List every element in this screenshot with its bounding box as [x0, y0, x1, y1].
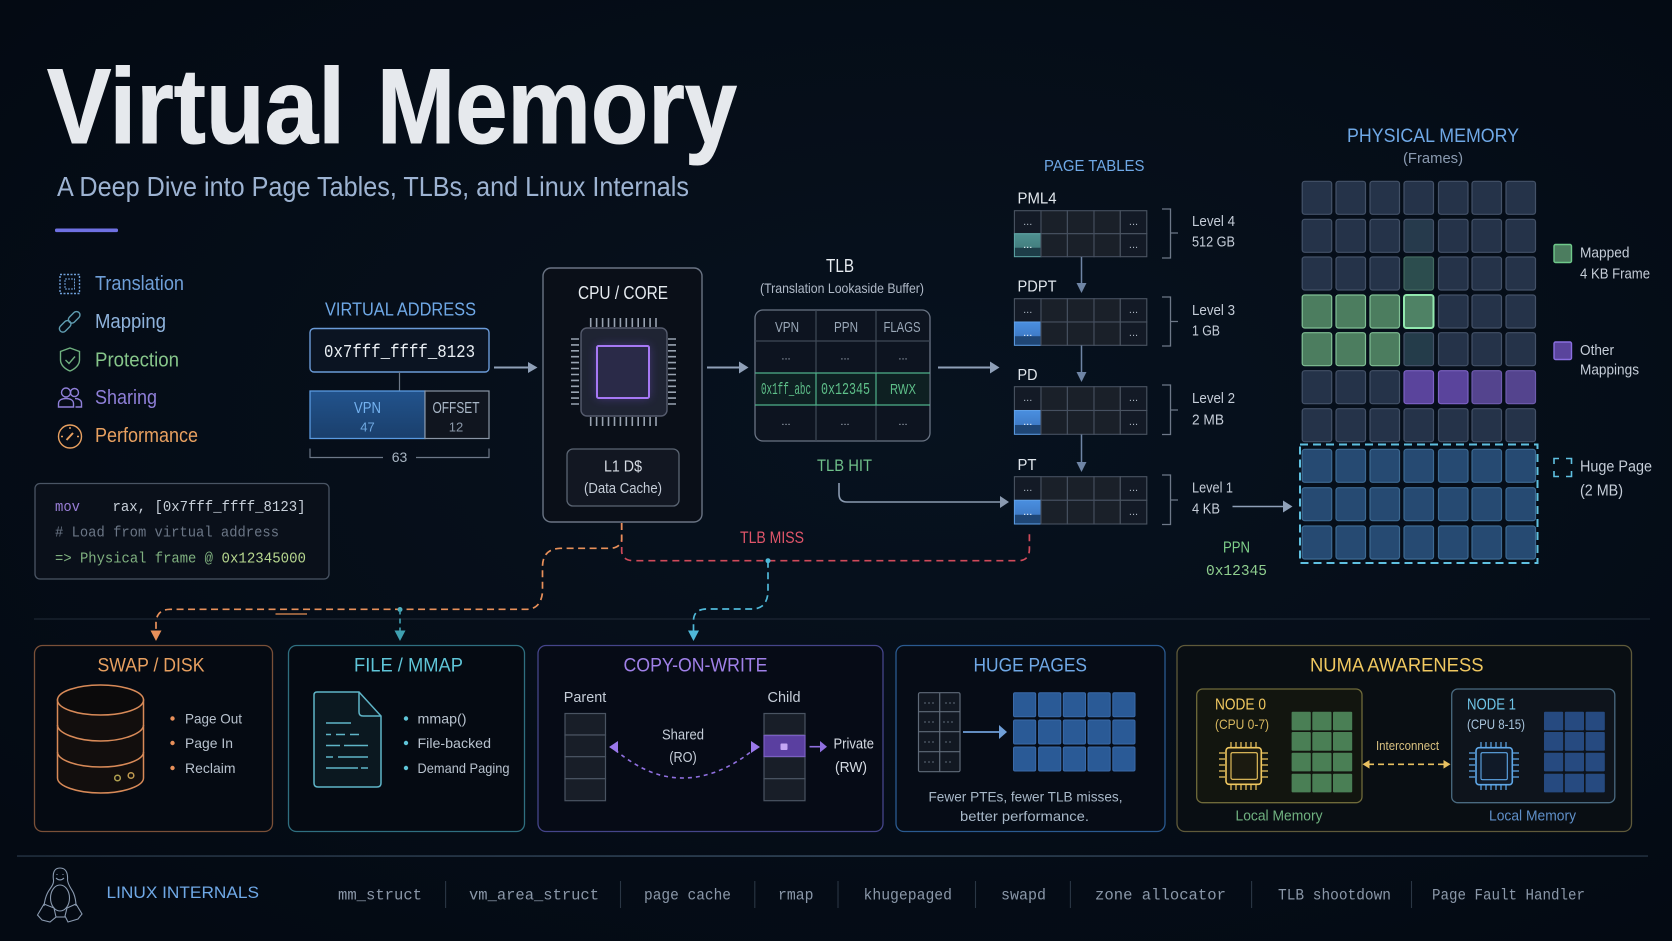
connector: miss to file — [394, 607, 406, 641]
section: page tables — [1014, 158, 1235, 524]
panel: CPU core — [543, 268, 702, 522]
level annotation: level 3: Level 3 — [1192, 302, 1235, 319]
icon: CPU chip — [571, 318, 676, 426]
offset field: 12 — [449, 420, 463, 434]
code line: comment: # Load from virtual address — [55, 524, 279, 542]
icon: performance — [58, 425, 82, 448]
table: PDPT: ... — [1023, 327, 1032, 339]
table: PD: ... — [1023, 392, 1032, 404]
table: PDPT: ... — [1129, 304, 1138, 316]
footer items: zone allocator — [1095, 886, 1226, 904]
shared label: Shared — [662, 726, 704, 744]
table: PML4: ... — [1023, 216, 1032, 228]
list: swap operations: Page In — [185, 735, 233, 751]
private label — [834, 736, 874, 776]
icon: database cylinder — [58, 685, 144, 793]
table: PT: ... — [1129, 482, 1138, 494]
legend: concepts — [58, 273, 198, 448]
footer items: mm_struct — [338, 886, 422, 904]
table row: hit entry: 0x1ff_abc — [761, 380, 811, 399]
table row: empty: ... — [898, 350, 908, 362]
level annotation: level 4: Level 4 — [1192, 213, 1235, 230]
table: PT: PT — [1018, 457, 1037, 474]
table row: hit entry — [761, 380, 916, 399]
icon: document — [314, 692, 381, 787]
list: swap operations: Page Out — [185, 710, 242, 726]
level annotation: level 3 — [1162, 297, 1235, 346]
connector: miss to copy-on-write — [688, 558, 770, 641]
table: PDPT: PDPT — [1018, 278, 1057, 296]
virtual address section — [310, 300, 489, 465]
footer: Linux internals — [38, 868, 1585, 922]
heading: page tables: PAGE TABLES — [1044, 158, 1144, 175]
label: PPN value: PPN — [1223, 540, 1250, 556]
subheading: frames: (Frames) — [1403, 150, 1463, 167]
huge page frames — [1302, 449, 1536, 559]
panel: copy-on-write — [538, 646, 883, 832]
parent page stack: Parent — [564, 689, 607, 706]
footer items: TLB shootdown — [1278, 886, 1391, 904]
subtitle: A Deep Dive into Page Tables, TLBs, and Linux Internals — [57, 171, 689, 202]
code box — [35, 484, 329, 579]
arrow: PT to physical memory — [1232, 500, 1292, 512]
VPN field: VPN — [354, 400, 381, 417]
legend: huge page — [1554, 458, 1652, 500]
connector: miss to swap — [150, 523, 622, 641]
level annotation: level 1: 4 KB — [1192, 500, 1220, 518]
table header: VPN — [775, 319, 799, 336]
title: Virtual — [47, 46, 345, 166]
shared label — [662, 726, 704, 766]
table: PD: ... — [1129, 416, 1138, 428]
table: PD: ... — [1023, 416, 1032, 428]
heading: file / mmap: FILE / MMAP — [354, 656, 463, 676]
footer heading: LINUX INTERNALS — [106, 883, 259, 902]
table: PT — [1014, 457, 1147, 524]
legend: huge page: Huge Page — [1580, 458, 1652, 476]
L1 data cache — [567, 449, 679, 506]
legend: mapped: Mapped — [1580, 246, 1630, 262]
arrow: TLB hit to PT — [839, 483, 1009, 508]
table row: empty — [781, 416, 908, 428]
huge frames grid — [1014, 693, 1135, 771]
arrow: address to CPU — [494, 362, 538, 373]
table: PML4 — [1014, 190, 1147, 257]
code line: mov: mov — [55, 499, 80, 516]
arrows: table walk — [1076, 257, 1086, 472]
NUMA node 0: NODE 0 — [1215, 696, 1266, 714]
table row: empty: ... — [781, 416, 791, 428]
icon: protection — [60, 348, 80, 371]
offset field — [425, 391, 489, 438]
address box: 0x7fff_ffff_8123 — [324, 343, 475, 363]
level annotation: level 4: 512 GB — [1192, 234, 1235, 250]
huge page outline — [1300, 444, 1538, 563]
private label: Private — [834, 736, 874, 752]
table: PDPT: ... — [1129, 327, 1138, 339]
legend: mapped — [1554, 244, 1650, 282]
label: PPN value — [1206, 540, 1267, 580]
title: Memory — [377, 46, 737, 166]
legend: mapped: 4 KB Frame — [1580, 266, 1650, 282]
label: protection: Protection — [95, 350, 179, 372]
VPN field — [310, 391, 425, 438]
table: PML4: PML4 — [1018, 190, 1057, 208]
code line: result: => Physical frame @ — [55, 550, 213, 568]
level annotation: level 1 — [1162, 475, 1233, 524]
code line: result — [55, 550, 306, 568]
level annotation: level 3: 1 GB — [1192, 322, 1220, 340]
table: PT: ... — [1023, 482, 1032, 494]
shared label: (RO) — [669, 749, 697, 766]
huge pages caption: Fewer PTEs, fewer TLB misses, — [928, 788, 1122, 804]
footer items — [338, 881, 1585, 908]
arrow: CPU to TLB — [707, 362, 748, 374]
footer items: swapd — [1001, 886, 1046, 904]
panel: huge pages — [896, 646, 1165, 832]
footer items: khugepaged — [864, 886, 952, 904]
caption: node 0 local memory: Local Memory — [1236, 808, 1323, 824]
L1 data cache: L1 D$ — [604, 458, 642, 476]
panel: TLB — [755, 256, 930, 441]
child page stack — [764, 689, 805, 801]
icon: mapping — [58, 310, 81, 334]
heading: NUMA awareness: NUMA AWARENESS — [1310, 656, 1484, 676]
label: PPN value: 0x12345 — [1206, 563, 1267, 580]
footer items: Page Fault Handler — [1432, 886, 1585, 904]
list: mmap features: File-backed — [418, 735, 491, 751]
node 1 local memory grid — [1544, 712, 1605, 792]
panel: NUMA awareness — [1177, 646, 1632, 832]
heading: swap / disk: SWAP / DISK — [98, 656, 205, 676]
table: PD: ... — [1129, 392, 1138, 404]
table row: empty: ... — [840, 416, 850, 428]
arrow: TLB to page tables — [938, 362, 1000, 374]
table: PD — [1014, 367, 1147, 434]
footer items: page cache — [644, 886, 731, 904]
table: PT: ... — [1129, 506, 1138, 518]
L1 data cache: (Data Cache) — [584, 480, 662, 497]
TLB table — [755, 310, 930, 441]
legend: other mappings: Mappings — [1580, 362, 1639, 378]
NUMA node 1 — [1452, 689, 1615, 803]
caption: node 1 local memory: Local Memory — [1489, 808, 1577, 824]
private label: (RW) — [835, 759, 867, 776]
table header: FLAGS — [884, 319, 920, 336]
parent page stack — [564, 689, 607, 801]
section: physical memory — [1300, 126, 1652, 563]
table: PML4: ... — [1023, 239, 1032, 251]
VPN field: 47 — [360, 420, 375, 434]
title — [47, 46, 737, 166]
table: PML4: ... — [1129, 216, 1138, 228]
NUMA node 0: (CPU 0-7) — [1215, 716, 1269, 732]
heading: CPU / CORE: CPU / CORE — [578, 283, 668, 303]
table: PT: ... — [1023, 506, 1032, 518]
table: PD: PD — [1018, 367, 1038, 384]
table: PML4: ... — [1129, 239, 1138, 251]
shared mapping curve — [609, 741, 760, 778]
width bracket 63: 63 — [392, 449, 407, 465]
heading: physical memory: PHYSICAL MEMORY — [1347, 126, 1519, 147]
table row: empty: ... — [840, 350, 850, 362]
label: mapping: Mapping — [95, 311, 166, 333]
level annotation: level 4 — [1162, 209, 1235, 258]
address box — [310, 328, 489, 372]
level annotation: level 2: 2 MB — [1192, 412, 1224, 428]
huge pages caption — [928, 788, 1122, 824]
icon: Tux penguin — [38, 868, 82, 922]
frame grid — [1302, 181, 1536, 442]
legend: other mappings — [1554, 342, 1639, 378]
icon: node 1 CPU — [1469, 742, 1519, 790]
offset field: OFFSET — [432, 400, 480, 417]
accent bar — [55, 228, 118, 232]
label: TLB hit: TLB HIT — [817, 456, 872, 475]
panel: swap / disk — [34, 646, 272, 832]
heading: virtual address: VIRTUAL ADDRESS — [325, 300, 476, 320]
footer items: vm_area_struct — [469, 886, 599, 904]
label: TLB miss: TLB MISS — [740, 528, 804, 547]
subheading: TLB expansion: (Translation Lookaside Buffer) — [760, 280, 924, 296]
arrow: private copy — [810, 741, 827, 752]
level annotation: level 2: Level 2 — [1192, 390, 1235, 407]
heading: copy-on-write: COPY-ON-WRITE — [624, 656, 768, 676]
label: translation: Translation — [95, 273, 184, 295]
code line: result: 0x12345000 — [222, 550, 306, 568]
label: sharing: Sharing — [95, 387, 157, 409]
huge pages caption: better performance. — [960, 808, 1089, 824]
icon: node 0 CPU — [1219, 742, 1268, 790]
legend: huge page: (2 MB) — [1580, 482, 1623, 500]
small page table — [918, 693, 960, 772]
icon: translation — [60, 274, 80, 294]
table row: empty — [781, 350, 908, 362]
list: swap operations — [170, 710, 242, 776]
table row: hit entry: RWX — [890, 381, 916, 398]
NUMA node 0 — [1197, 689, 1362, 803]
level annotation: level 2 — [1162, 385, 1235, 434]
list: mmap features — [404, 710, 510, 776]
legend: other mappings: Other — [1580, 343, 1614, 359]
width bracket 63 — [310, 448, 489, 465]
heading: TLB: TLB — [826, 256, 854, 276]
connector: TLB miss to page tables — [622, 523, 1029, 561]
table: PDPT — [1014, 278, 1147, 345]
level annotation: level 1: Level 1 — [1192, 480, 1233, 496]
arrow: table to huge frames — [963, 725, 1007, 739]
child page stack: Child — [768, 689, 800, 706]
list: mmap features: mmap() — [418, 710, 466, 726]
table row: empty: ... — [781, 350, 791, 362]
table: PDPT: ... — [1023, 304, 1032, 316]
node 0 local memory grid — [1292, 712, 1352, 792]
NUMA node 1: NODE 1 — [1467, 696, 1516, 714]
list: mmap features: Demand Paging — [418, 760, 510, 776]
table row: empty: ... — [898, 416, 908, 428]
footer items: rmap — [778, 886, 814, 904]
list: swap operations: Reclaim — [185, 760, 236, 776]
table header: PPN — [834, 319, 858, 336]
panel: file / mmap — [288, 646, 524, 832]
table row: hit entry: 0x12345 — [821, 380, 870, 399]
code line: mov: rax, [0x7fff_ffff_8123] — [112, 499, 306, 516]
NUMA node 1: (CPU 8-15) — [1467, 716, 1525, 732]
icon: sharing — [58, 388, 82, 407]
interconnect link: Interconnect — [1376, 738, 1439, 753]
heading: huge pages: HUGE PAGES — [974, 656, 1087, 676]
interconnect link — [1362, 738, 1450, 769]
label: performance: Performance — [95, 425, 198, 447]
table header — [775, 319, 920, 336]
